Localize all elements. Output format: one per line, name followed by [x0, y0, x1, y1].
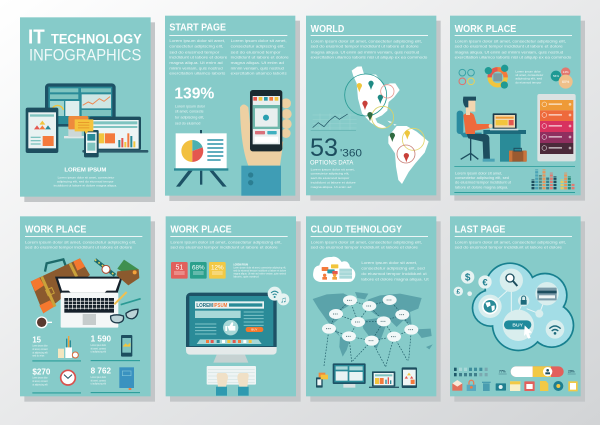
heading: WORLD: [311, 24, 344, 35]
cover caption: LOREM IPSUM: [64, 167, 107, 173]
note: [233, 262, 286, 279]
stat 8 762: ut adipiscing elit: [91, 382, 106, 386]
text columns: exercitation ullamco laboris: [231, 71, 287, 76]
text columns: incididunt ut labore et dolore: [231, 55, 290, 60]
intro text: Lorem ipsum dolor sit amet, consectetur adipiscing elit,: [455, 239, 566, 244]
stat $270: [32, 366, 81, 393]
devices row: [316, 363, 417, 388]
note: Lorem ipsum dolor sit amet, consectetur adipiscing elit,: [233, 266, 286, 270]
heading: START PAGE: [169, 23, 227, 34]
stat 1 590: [91, 334, 140, 361]
desktop computer: BUY: [251, 328, 257, 332]
map of the Americas: [345, 66, 429, 184]
stat 53'360: 53: [310, 134, 338, 162]
text columns: minim veniam, quis nostrud: [231, 65, 284, 70]
small note: sit amet, consectetur: [515, 73, 543, 77]
small note: Lorem ipsum dolor: [515, 69, 541, 73]
suitcase: [31, 258, 90, 313]
intro text: [311, 239, 422, 250]
currency coins: $: [465, 273, 471, 284]
cover caption: Lorem ipsum dolor sit amet, consectetur: [58, 176, 114, 180]
stat 1 590: Lorem ipsum dolor: [91, 343, 106, 347]
stat 15: sed do eius: [32, 354, 45, 358]
cover caption: adipiscing elit, sed do eiusmod tempor: [57, 180, 114, 184]
stat 53'360: magna aliqua. Ut enim ad: [311, 185, 352, 189]
text columns: Lorem ipsum dolor sit amet,: [169, 38, 225, 43]
stat 53'360: incididunt ut labore et dolore: [311, 180, 356, 184]
stat badges: [171, 262, 226, 279]
coffee cup: [36, 316, 52, 328]
pencil, pen and glasses: [111, 292, 141, 323]
percentage bubbles: 60%: [562, 80, 570, 84]
intro text: Lorem ipsum dolor sit amet, consectetur adipiscing elit,: [311, 239, 422, 244]
side text: consectetur adipiscing elit, sed: [361, 265, 425, 270]
panel: cover: [20, 17, 155, 202]
stat 15: sit amet, consect: [32, 347, 48, 351]
stat $270: sit amet, consect: [32, 379, 48, 383]
stat 1 590: 1 590: [91, 334, 111, 344]
intro text: exercitation ullamco laboris nisi ut aliquip ex ea commodo: [455, 55, 572, 60]
stat 139%: Lorem ipsum dolor: [175, 103, 206, 108]
heading: LAST PAGE: [455, 225, 506, 236]
intro text: exercitation ullamco laboris nisi ut aliquip ex ea commodo: [311, 55, 428, 60]
text columns: consectetur adipiscing elit,: [169, 44, 223, 49]
intro text: sed do eiusmod tempor incididunt ut labore et dolore: [311, 44, 420, 49]
text columns: minim veniam, quis nostrud: [169, 65, 223, 70]
intro text: [25, 239, 136, 250]
stat 139%: [174, 86, 214, 125]
text columns: [169, 38, 290, 76]
intro text: [455, 239, 566, 250]
stat 8 762: [91, 366, 140, 393]
intro text: Lorem ipsum dolor sit amet, consectetur adipiscing elit,: [25, 239, 136, 244]
stat 53'360: '360: [340, 148, 362, 160]
panel: last page: [450, 216, 585, 402]
hand holding phone: [240, 90, 292, 196]
stat 1 590: sit amet, consect: [91, 346, 106, 350]
percentage bubbles: 14%: [563, 70, 569, 74]
easel with pie chart: [174, 130, 228, 187]
stat $270: $270: [32, 366, 51, 376]
dot column chart: [533, 169, 573, 189]
currency coins: £: [456, 289, 460, 296]
stat badges: 68%: [192, 264, 205, 271]
briefcase: [509, 148, 527, 162]
title: INFOGRAPHICS: [29, 45, 141, 64]
footer text: do eiusmod tempor incididunt ut: [455, 180, 512, 185]
currency coins: [454, 270, 492, 296]
wifi icon: [549, 326, 561, 335]
text columns: consectetur adipiscing elit,: [231, 44, 285, 49]
currency coins: €: [482, 277, 488, 287]
intro text: Lorem ipsum dolor sit amet, consectetur adipiscing elit,: [455, 38, 566, 43]
stat 8 762: Lorem ipsum dolor: [91, 375, 106, 379]
small icon grid: [454, 368, 488, 376]
text columns: magna aliqua. Ut enim ad: [169, 60, 223, 65]
stat 1 590: ut adipiscing elit: [91, 350, 106, 354]
phone: [84, 130, 99, 157]
laptop: [82, 117, 148, 153]
desk and laptop: [483, 113, 526, 162]
intro text: [455, 38, 572, 60]
desktop computer: LOREM: [196, 303, 213, 309]
card icon: [537, 288, 557, 300]
text columns: sed do eiusmod tempor: [169, 49, 220, 54]
desktop computer: [186, 293, 277, 363]
small note: adipiscing elit, sed: [515, 77, 542, 81]
stat 53'360: [310, 134, 362, 189]
icon row: [452, 380, 578, 391]
stat 53'360: Lorem ipsum dolor sit amet,: [311, 167, 355, 171]
percentage bubbles: 56%: [553, 74, 559, 78]
slider: 20%: [568, 370, 575, 374]
intro text: Lorem ipsum dolor sit amet, consectetur adipiscing elit,: [170, 239, 282, 244]
intro text: sed do eiusmod tempor incididunt ut labore et dolore: [170, 245, 279, 250]
desktop monitor: [45, 83, 116, 138]
stat $270: Lorem ipsum dolor: [32, 376, 48, 380]
note: sed do eiusmod tempor incididunt ut labore et dolore: [233, 269, 286, 273]
percentage bubbles: [551, 67, 573, 89]
text columns: incididunt ut labore et dolore: [169, 55, 228, 60]
panel: work place desk: [450, 16, 585, 201]
text columns: exercitation ullamco laboris: [169, 71, 225, 76]
footer text: labore et dolore magna aliqua.: [455, 185, 508, 190]
network world map: [313, 292, 433, 367]
intro text: magna aliqua. Ut enim ad minim veniam, quis nostrud: [455, 49, 563, 54]
stat badges: 51: [175, 264, 183, 271]
stat 53'360: OPTIONS DATA: [310, 160, 354, 167]
stat 53'360: sed do eiusmod tempor: [311, 176, 349, 180]
panel: world: [306, 16, 441, 201]
title: TECHNOLOGY: [51, 32, 142, 47]
stat $270: ut adipiscing elit: [32, 382, 48, 386]
text columns: sed do eiusmod tempor: [231, 49, 281, 54]
intro text: Lorem ipsum dolor sit amet, consectetur adipiscing elit,: [311, 38, 422, 43]
small note: do eiusmod tempor: [515, 80, 541, 84]
chat bubbles: [68, 116, 93, 134]
device with list: [537, 94, 576, 161]
wallet: [117, 260, 139, 285]
cloud icon: [313, 257, 355, 282]
text columns: magna aliqua. Ut enim ad: [231, 60, 284, 65]
stat 139%: sed do eiusmod: [175, 120, 200, 125]
slider: 77%: [499, 370, 506, 374]
side text: [361, 260, 430, 282]
footer text: Lorem ipsum dolor sit amet,: [455, 171, 502, 176]
panel: start page: [165, 16, 300, 201]
keyboard and typing hands: [207, 366, 256, 396]
heading: WORK PLACE: [170, 225, 232, 236]
small note: [515, 69, 543, 84]
magnifier icon: [506, 274, 517, 286]
open laptop: [55, 277, 123, 328]
lock icon: [521, 296, 527, 305]
note: LOREM IPSUM: [233, 262, 248, 266]
slider: [499, 366, 576, 377]
line chart: [311, 113, 357, 131]
desktop computer: IPSUM: [213, 303, 228, 309]
note: laboris, quis nostrud: [233, 275, 259, 279]
side text: do eiusmod tempor incididunt ut: [361, 271, 428, 276]
stat badges: 12%: [211, 264, 224, 271]
side text: Lorem ipsum dolor sit amet,: [361, 260, 417, 265]
stat 139%: sit amet, consecte: [175, 109, 204, 114]
note: magna aliqua. Ut enim ad minim veniam, quis nostrud: [233, 272, 286, 276]
donut chart: [485, 65, 508, 89]
watch: [95, 260, 115, 275]
tablet: [26, 108, 58, 153]
text columns: Lorem ipsum dolor sit amet,: [231, 38, 287, 43]
stat 53'360: consectetur adipiscing elit,: [311, 172, 350, 176]
seated worker: [457, 97, 495, 162]
footer text: [455, 171, 512, 190]
cover caption: incididunt ut labore et dolore magna aliqua.: [54, 184, 117, 188]
stat 139%: tur adipiscing elit,: [175, 114, 204, 119]
stat 15: ut adipiscing elit: [32, 350, 48, 354]
intro text: sed do eiusmod tempor incididunt ut labore et dolore: [25, 245, 133, 250]
globe icon: [482, 298, 498, 314]
heading: WORK PLACE: [25, 225, 87, 236]
side text: labore et dolore magna aliqua. Ut: [361, 277, 430, 282]
wifi and music icons: ♫: [280, 295, 287, 305]
panel: work place items: [20, 216, 155, 402]
wifi and music icons: [268, 287, 289, 305]
stat 8 762: 8 762: [91, 366, 111, 376]
intro text: magna aliqua. Ut enim ad minim veniam, quis nostrud: [311, 49, 419, 54]
stat 15: [32, 334, 81, 361]
big cloud diagram: [472, 262, 574, 351]
stat 139%: 139%: [174, 86, 214, 103]
heading: WORK PLACE: [455, 24, 517, 35]
title: [28, 26, 142, 64]
panel: cloud technology: [306, 216, 441, 402]
stat 15: 15: [32, 334, 41, 344]
intro text: sed do eiusmod tempor incididunt ut labore et dolore: [311, 245, 419, 250]
intro text: sed do eiusmod tempor incididunt ut labore et dolore: [455, 44, 564, 49]
intro text: sed do eiusmod tempor incididunt ut labore et dolore: [455, 245, 563, 250]
stat 8 762: sit amet, consect: [91, 378, 106, 382]
intro text: [311, 38, 428, 60]
panel: work place computer: [166, 216, 301, 402]
ring icons: [459, 69, 474, 85]
buy button: BUY: [512, 323, 524, 329]
title: IT: [28, 26, 45, 49]
stat 15: Lorem ipsum dolor: [32, 344, 48, 348]
heading: CLOUD TEHNOLOGY: [311, 225, 403, 236]
cover caption: [54, 167, 117, 188]
intro text: [170, 239, 282, 250]
footer text: consectetur adipiscing elit, sed: [455, 175, 509, 180]
